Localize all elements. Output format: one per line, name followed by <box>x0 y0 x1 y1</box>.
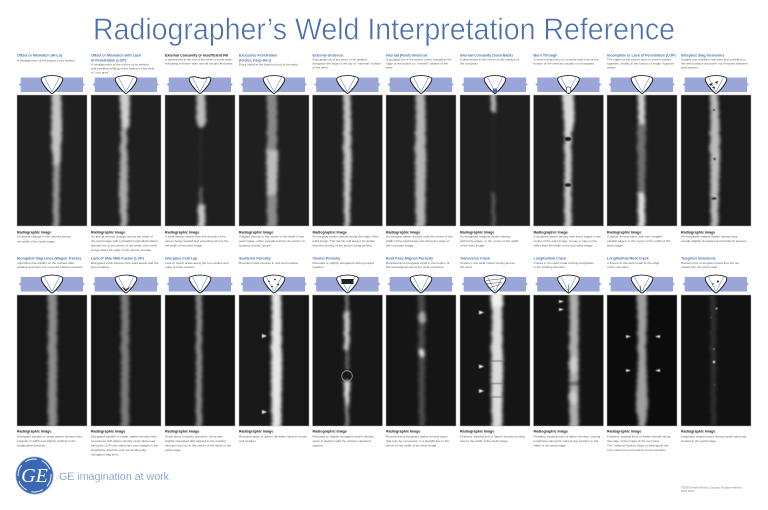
description <box>312 261 374 269</box>
description: The edges of the pieces have not been welded <box>607 58 671 62</box>
radiographic image text: Radiographic Image <box>239 230 273 234</box>
radiographic image text: that may be connected, in a straight line in the <box>386 439 449 443</box>
radiographic image text <box>460 230 519 248</box>
radiographic image text: center of the weld image. It may or may not be <box>534 239 597 243</box>
weld diagram <box>166 77 233 94</box>
radiograph <box>17 293 87 428</box>
description: Cracks in the weld metal running lengthwise <box>534 261 594 265</box>
radiographic image text: than the density of the pieces being welded. <box>312 244 373 248</box>
description: Usually non-metallic impurities that solidified on <box>681 58 746 62</box>
radiographic image text: isolated circular “drops”. <box>239 244 272 248</box>
radiographic image text: A darker density band, with very straight <box>607 234 662 238</box>
radiograph <box>91 293 161 428</box>
title: Radiographer’s Weld Interpretation Reference <box>93 12 675 46</box>
radiographic image text: A localized darker density with fuzzy edges in the <box>534 234 601 238</box>
description <box>90 261 159 269</box>
radiographic image text <box>386 430 449 448</box>
weld diagram <box>535 76 602 94</box>
panel: interpass cold lap <box>165 256 235 452</box>
radiographic image text: spots in clusters with the clusters randomly <box>312 439 372 443</box>
weld diagram <box>92 275 159 293</box>
radiographic image text: A weld density darker than the density of the <box>165 234 226 238</box>
radiographic image text: usually slightly elongated and randomly spaced. <box>681 239 747 243</box>
radiographic image text: Radiographic Image <box>165 430 199 434</box>
description: Extra metal at the bottom (root) of the weld. <box>239 62 299 66</box>
radiographic image text: weld image. <box>607 244 624 248</box>
radiograph <box>534 293 604 428</box>
weld diagram <box>388 275 454 293</box>
radiographic image text: of the weld image. <box>460 244 485 248</box>
radiograph <box>534 93 604 228</box>
radiograph <box>386 93 456 228</box>
weld diagram <box>240 76 307 94</box>
description <box>386 261 449 269</box>
panel: external concavity <box>165 54 235 248</box>
description: A gouging out of the piece to be welded, <box>312 58 368 62</box>
radiographic image text: lengthwise direction and not winding like <box>91 448 146 452</box>
radiograph <box>239 293 309 428</box>
radiographic image text <box>165 230 229 248</box>
radiograph <box>239 93 309 228</box>
heading: Lack of Side Wall Fusion (LOF) <box>91 256 145 260</box>
panel: offset or mismatch <box>17 54 87 244</box>
heading: Interpass Cold Lap <box>165 256 198 260</box>
description <box>534 261 594 269</box>
radiographic image text: longitudinal direction. <box>17 444 46 448</box>
radiograph <box>681 293 751 428</box>
description: edge of lower passes. <box>165 265 195 269</box>
radiograph <box>312 293 382 428</box>
description <box>17 261 83 269</box>
GE logo: GE <box>21 465 48 487</box>
radiographic image text <box>91 430 158 456</box>
weld diagram <box>388 76 454 94</box>
description: Cracks in the weld metal running across <box>460 261 515 265</box>
heading: (Icicles, Drop-thru) <box>239 58 272 62</box>
description: Random bits of tungsten fused into but not <box>681 261 739 265</box>
radiographic image text <box>681 230 747 243</box>
description <box>534 58 599 66</box>
description: the weld surface and were not removed between <box>681 62 748 66</box>
radiographic image text: An abrupt density change across the width of <box>91 234 153 238</box>
description: together. <box>312 265 325 269</box>
radiographic image text: slightly elongated tails aligned in the welding <box>165 439 226 443</box>
radiographic image text: An irregularly-shaped darker density spot, <box>681 234 738 238</box>
radiographic image text <box>165 430 231 452</box>
description: weld passes. <box>681 66 699 70</box>
description: indicating a thinner than normal section thickness. <box>165 62 234 66</box>
description <box>681 261 739 269</box>
radiograph <box>91 93 161 228</box>
heading: Tungsten Inclusions <box>681 256 716 260</box>
heading: External Undercut <box>312 54 344 58</box>
weld diagram <box>608 275 675 293</box>
radiographic image text: full width of the weld image. <box>165 244 203 248</box>
radiographic image text <box>386 230 453 248</box>
radiographic image text: Radiographic Image <box>17 430 51 434</box>
radiographic image text: across the width of the weld image. <box>460 439 508 443</box>
radiograph <box>460 293 530 428</box>
radiographic image text: An abrupt change in film density across <box>17 234 71 238</box>
panel: tungsten inclusions <box>681 256 751 443</box>
heading: Elongated Slag Lines (Wagon Tracks) <box>17 256 82 260</box>
description: A misalignment of the pieces to be welded. <box>17 58 76 62</box>
radiographic image text: width of the weld image. <box>534 444 567 448</box>
radiographic image text: sometimes with darker density spots dispersed <box>91 439 155 443</box>
description: Lack of fusion areas along the top surface and <box>165 261 229 265</box>
weld diagram <box>92 76 159 94</box>
radiographic image text: center of the width of the weld image. <box>386 444 437 448</box>
weld diagram <box>608 76 675 94</box>
description: or “root area”. <box>91 70 110 74</box>
radiographic image text <box>607 230 671 248</box>
panel: external undercut <box>312 54 382 248</box>
copyright note <box>681 486 743 493</box>
radiographic image text: parallel edges, in the center of the width of the <box>607 239 671 243</box>
radiographic image text <box>460 430 525 443</box>
description: melted into the weld metal. <box>681 265 718 269</box>
description <box>607 58 674 70</box>
panel: longitudinal crack <box>534 256 604 448</box>
heading: Cluster Porosity <box>312 256 340 260</box>
radiograph <box>386 293 456 428</box>
weld diagram <box>166 275 233 293</box>
copyright note: ©2008 General Electric Company. All rights reserved. <box>681 486 743 490</box>
radiographic image text: Rounded spots of darker densities random in size <box>239 434 307 438</box>
panel: incomplete penetration <box>607 54 677 248</box>
radiographic image text: Radiographic Image <box>607 230 641 234</box>
copyright note: GEIT-XXXX <box>681 489 695 493</box>
description: A misalignment of the pieces to be welded <box>91 62 149 66</box>
weld diagram <box>682 275 749 293</box>
radiographic image text: Radiographic Image <box>239 430 273 434</box>
panel: lack of side wall fusion <box>90 256 161 456</box>
heading: Longitudinal Crack <box>534 256 566 260</box>
description: of the root pass. <box>607 265 629 269</box>
radiographic image text: weld image, either extended along the weld or in <box>239 239 306 243</box>
radiographic image text: An irregular darker density along the edge of the <box>312 234 379 238</box>
description <box>460 58 519 66</box>
radiographic image text <box>534 230 601 248</box>
radiographic image text: pieces being welded and extending across the <box>165 239 229 243</box>
radiographic image text <box>312 230 379 248</box>
panel: internal undercut <box>386 54 456 248</box>
radiographic image text: Feathery, twisting lines of darker density, running <box>534 434 601 438</box>
description <box>607 261 660 269</box>
radiographic image text: width of the weld image and along the edge of <box>386 239 449 243</box>
radiographic image text: Feathery, twisting line of darker density running <box>460 434 525 438</box>
description: bottom of the weld but usually not elongated. <box>534 62 595 66</box>
description: A depression in the center of the surface of <box>460 58 519 62</box>
radiographic image text: Radiographic Image <box>460 230 494 234</box>
weld diagram <box>18 76 85 94</box>
radiograph <box>312 93 382 228</box>
heading: External Concavity or Insufficient Fill <box>165 54 228 58</box>
radiographic image text <box>312 430 374 448</box>
radiographic image text: wider than the width of the root pass image. <box>534 244 593 248</box>
panel: internal concavity <box>460 54 530 248</box>
panel: root pass aligned porosity <box>386 256 456 448</box>
weld diagram <box>462 275 528 293</box>
tagline: GE imagination at work <box>59 471 169 483</box>
radiographic image text: image along the edge of the density change. <box>91 248 152 252</box>
radiographic image text: and location. <box>239 439 257 443</box>
radiographic image text: An irregular darker density near the center of the <box>386 234 453 238</box>
heading: Root Pass Aligned Porosity <box>386 256 433 260</box>
radiograph <box>460 93 530 228</box>
radiographic image text: Radiographic Image <box>91 430 125 434</box>
heading: Offset or Mismatch with Lack <box>91 54 141 58</box>
description <box>681 58 748 70</box>
description <box>91 62 155 74</box>
description: A depression in the top of the weld or cover pass, <box>165 58 233 62</box>
description: Rounded voids random in size and location. <box>239 261 299 265</box>
radiographic image text: Small spots of darker densities, some with <box>165 434 223 438</box>
radiographic image text: weld image. The density will always be darker <box>312 239 375 243</box>
heading: Scattered Porosity <box>239 256 271 260</box>
weld diagram <box>240 275 307 293</box>
panel: scattered porosity <box>239 256 309 443</box>
description: alongside the edge of the top or “external” surface <box>312 62 381 66</box>
radiographic image text: direction and not in the center of the width of the <box>165 444 231 448</box>
description: Rounded or slightly elongated voids grouped <box>312 261 374 265</box>
radiographic image text: Radiographic Image <box>165 230 199 234</box>
radiographic image text: Elongated parallel or single darker density lines, <box>17 434 83 438</box>
description: welds. <box>607 66 616 70</box>
description: Elongated voids between the weld beads and the <box>91 261 159 265</box>
radiographic image text: the edge of the image of the root pass. <box>607 439 660 443</box>
radiograph <box>17 93 87 228</box>
radiographic image text: with fuzzy edges, in the center of the width <box>460 239 519 243</box>
radiograph <box>607 293 677 428</box>
radiographic image text: density line at the center of the width of the weld <box>91 244 157 248</box>
description: welding and were not removed between passes. <box>17 265 83 269</box>
radiographic image text: Radiographic Image <box>534 230 568 234</box>
radiograph <box>165 293 235 428</box>
radiograph <box>165 93 235 228</box>
radiographic image text: elongated slag lines. <box>91 452 119 456</box>
description <box>386 58 452 70</box>
heading: Burn Through <box>534 54 557 58</box>
panel: interpass slag inclusions <box>681 54 751 243</box>
radiographic image text: Radiographic Image <box>681 430 715 434</box>
radiographic image text: the root pass image. <box>386 244 414 248</box>
heading: of Penetration (LOP) <box>91 58 127 62</box>
radiographic image text: Radiographic Image <box>460 430 494 434</box>
radiographic image text <box>17 230 71 244</box>
radiograph <box>607 93 677 228</box>
radiographic image text: The “twisting” feature helps to distinguish the <box>607 444 669 448</box>
radiographic image text <box>91 230 158 252</box>
description: the weld aligned along the weld centerline. <box>386 265 444 269</box>
radiographic image text: weld image. <box>165 448 182 452</box>
panel: elongated slag lines <box>17 256 87 448</box>
heading: Interpass Slag Inclusions <box>681 54 724 58</box>
description: in the welding direction. <box>534 265 566 269</box>
radiographic image text <box>17 430 83 448</box>
radiographic image text: Radiographic Image <box>17 230 51 234</box>
radiographic image text: the weld image with a straight longitudinal darker <box>91 239 158 243</box>
radiographic image text: Irregularly shaped lower density spots randomly <box>681 434 747 438</box>
radiographic image text: Rounded and elongated darker density spots, <box>386 434 449 438</box>
radiographic image text: along the LOF lines which are very straight in the <box>91 444 158 448</box>
panel: transverse crack <box>460 256 530 443</box>
radiographic image text: Radiographic Image <box>312 430 347 434</box>
radiographic image text: Radiographic Image <box>681 230 715 234</box>
radiographic image text: Feathery, twisting lines of darker density along <box>607 434 671 438</box>
description: Impurities that solidify on the surface after <box>17 261 74 265</box>
radiographic image text: Radiographic Image <box>386 430 420 434</box>
radiographic image text: Radiographic Image <box>91 230 125 234</box>
panel: longitudinal root crack <box>607 256 677 452</box>
description: together, usually at the bottom of single V-groove <box>607 62 674 66</box>
description <box>165 58 234 66</box>
description: the root pass. <box>460 62 479 66</box>
radiographic image text <box>534 430 601 448</box>
description: A severe depression or a crater-type hole at the <box>534 58 599 62</box>
description: of the weld. <box>312 66 328 70</box>
description: and insufficient filling of the bottom of the weld <box>91 66 155 70</box>
description: A gouging out of the parent metal, alongside the <box>386 58 452 62</box>
description <box>165 261 229 269</box>
weld diagram <box>18 275 85 293</box>
panel: burn through <box>534 54 604 248</box>
radiographic image text <box>239 430 307 443</box>
weld diagram <box>314 275 380 293</box>
heading: Longitudinal Root Crack <box>607 256 649 260</box>
radiographic image text: irregular in width and slightly winding in the <box>17 439 76 443</box>
radiographic image text: located in the weld image. <box>681 439 717 443</box>
weld diagram <box>314 76 380 94</box>
heading: Incomplete or Lack of Penetration (LOP) <box>607 54 676 58</box>
radiographic image text: Radiographic Image <box>534 430 568 434</box>
weld diagram <box>682 76 749 94</box>
radiographic image text: Radiographic Image <box>312 230 347 234</box>
heading: Offset or Mismatch (Hi-Lo) <box>17 54 63 58</box>
radiographic image text: spaced. <box>312 444 323 448</box>
description: edge of the bottom or “internal” surface of the <box>386 62 448 66</box>
weld diagram <box>535 275 602 293</box>
radiographic image text <box>239 230 306 248</box>
radiographic image text: Radiographic Image <box>386 230 420 234</box>
radiographic image text: Rounded or slightly elongated darker density <box>312 434 374 438</box>
weld diagram <box>462 76 528 94</box>
panel: offset with LOP <box>91 54 161 252</box>
radiographic image text: root crack from incomplete root penetration. <box>607 448 667 452</box>
radiographic image text: Elongated parallel or single, darker density lines, <box>91 434 158 438</box>
radiographic image text <box>607 430 671 452</box>
heading: Internal Concavity (Suck Back) <box>460 54 514 58</box>
description: A fissure in the weld metal at the edge <box>607 261 660 265</box>
radiographic image text: the width of the weld image. <box>17 240 55 244</box>
heading <box>239 54 277 62</box>
description <box>312 58 381 70</box>
GE logo <box>16 457 53 494</box>
panel: excessive penetration <box>239 54 309 248</box>
radiographic image text: A lighter density in the center of the width of the <box>239 234 304 238</box>
description: weld. <box>386 66 393 70</box>
heading <box>91 54 141 62</box>
description: Rounded and elongated voids in the bottom of <box>386 261 449 265</box>
description <box>460 261 515 269</box>
radiographic image text <box>681 430 747 443</box>
panel: cluster porosity <box>312 256 382 448</box>
radiographic image text: Radiographic Image <box>607 430 641 434</box>
radiographic image text: lengthwise along the weld at any location in the <box>534 439 598 443</box>
description: the weld. <box>460 265 473 269</box>
heading: Excessive Penetration <box>239 54 277 58</box>
radiograph <box>681 93 751 228</box>
heading: Internal (Root) Undercut <box>386 54 428 58</box>
heading: Transverse Crack <box>460 256 490 260</box>
description: joint surfaces. <box>90 265 110 269</box>
radiographic image text: An elongated irregular darker density <box>460 234 511 238</box>
